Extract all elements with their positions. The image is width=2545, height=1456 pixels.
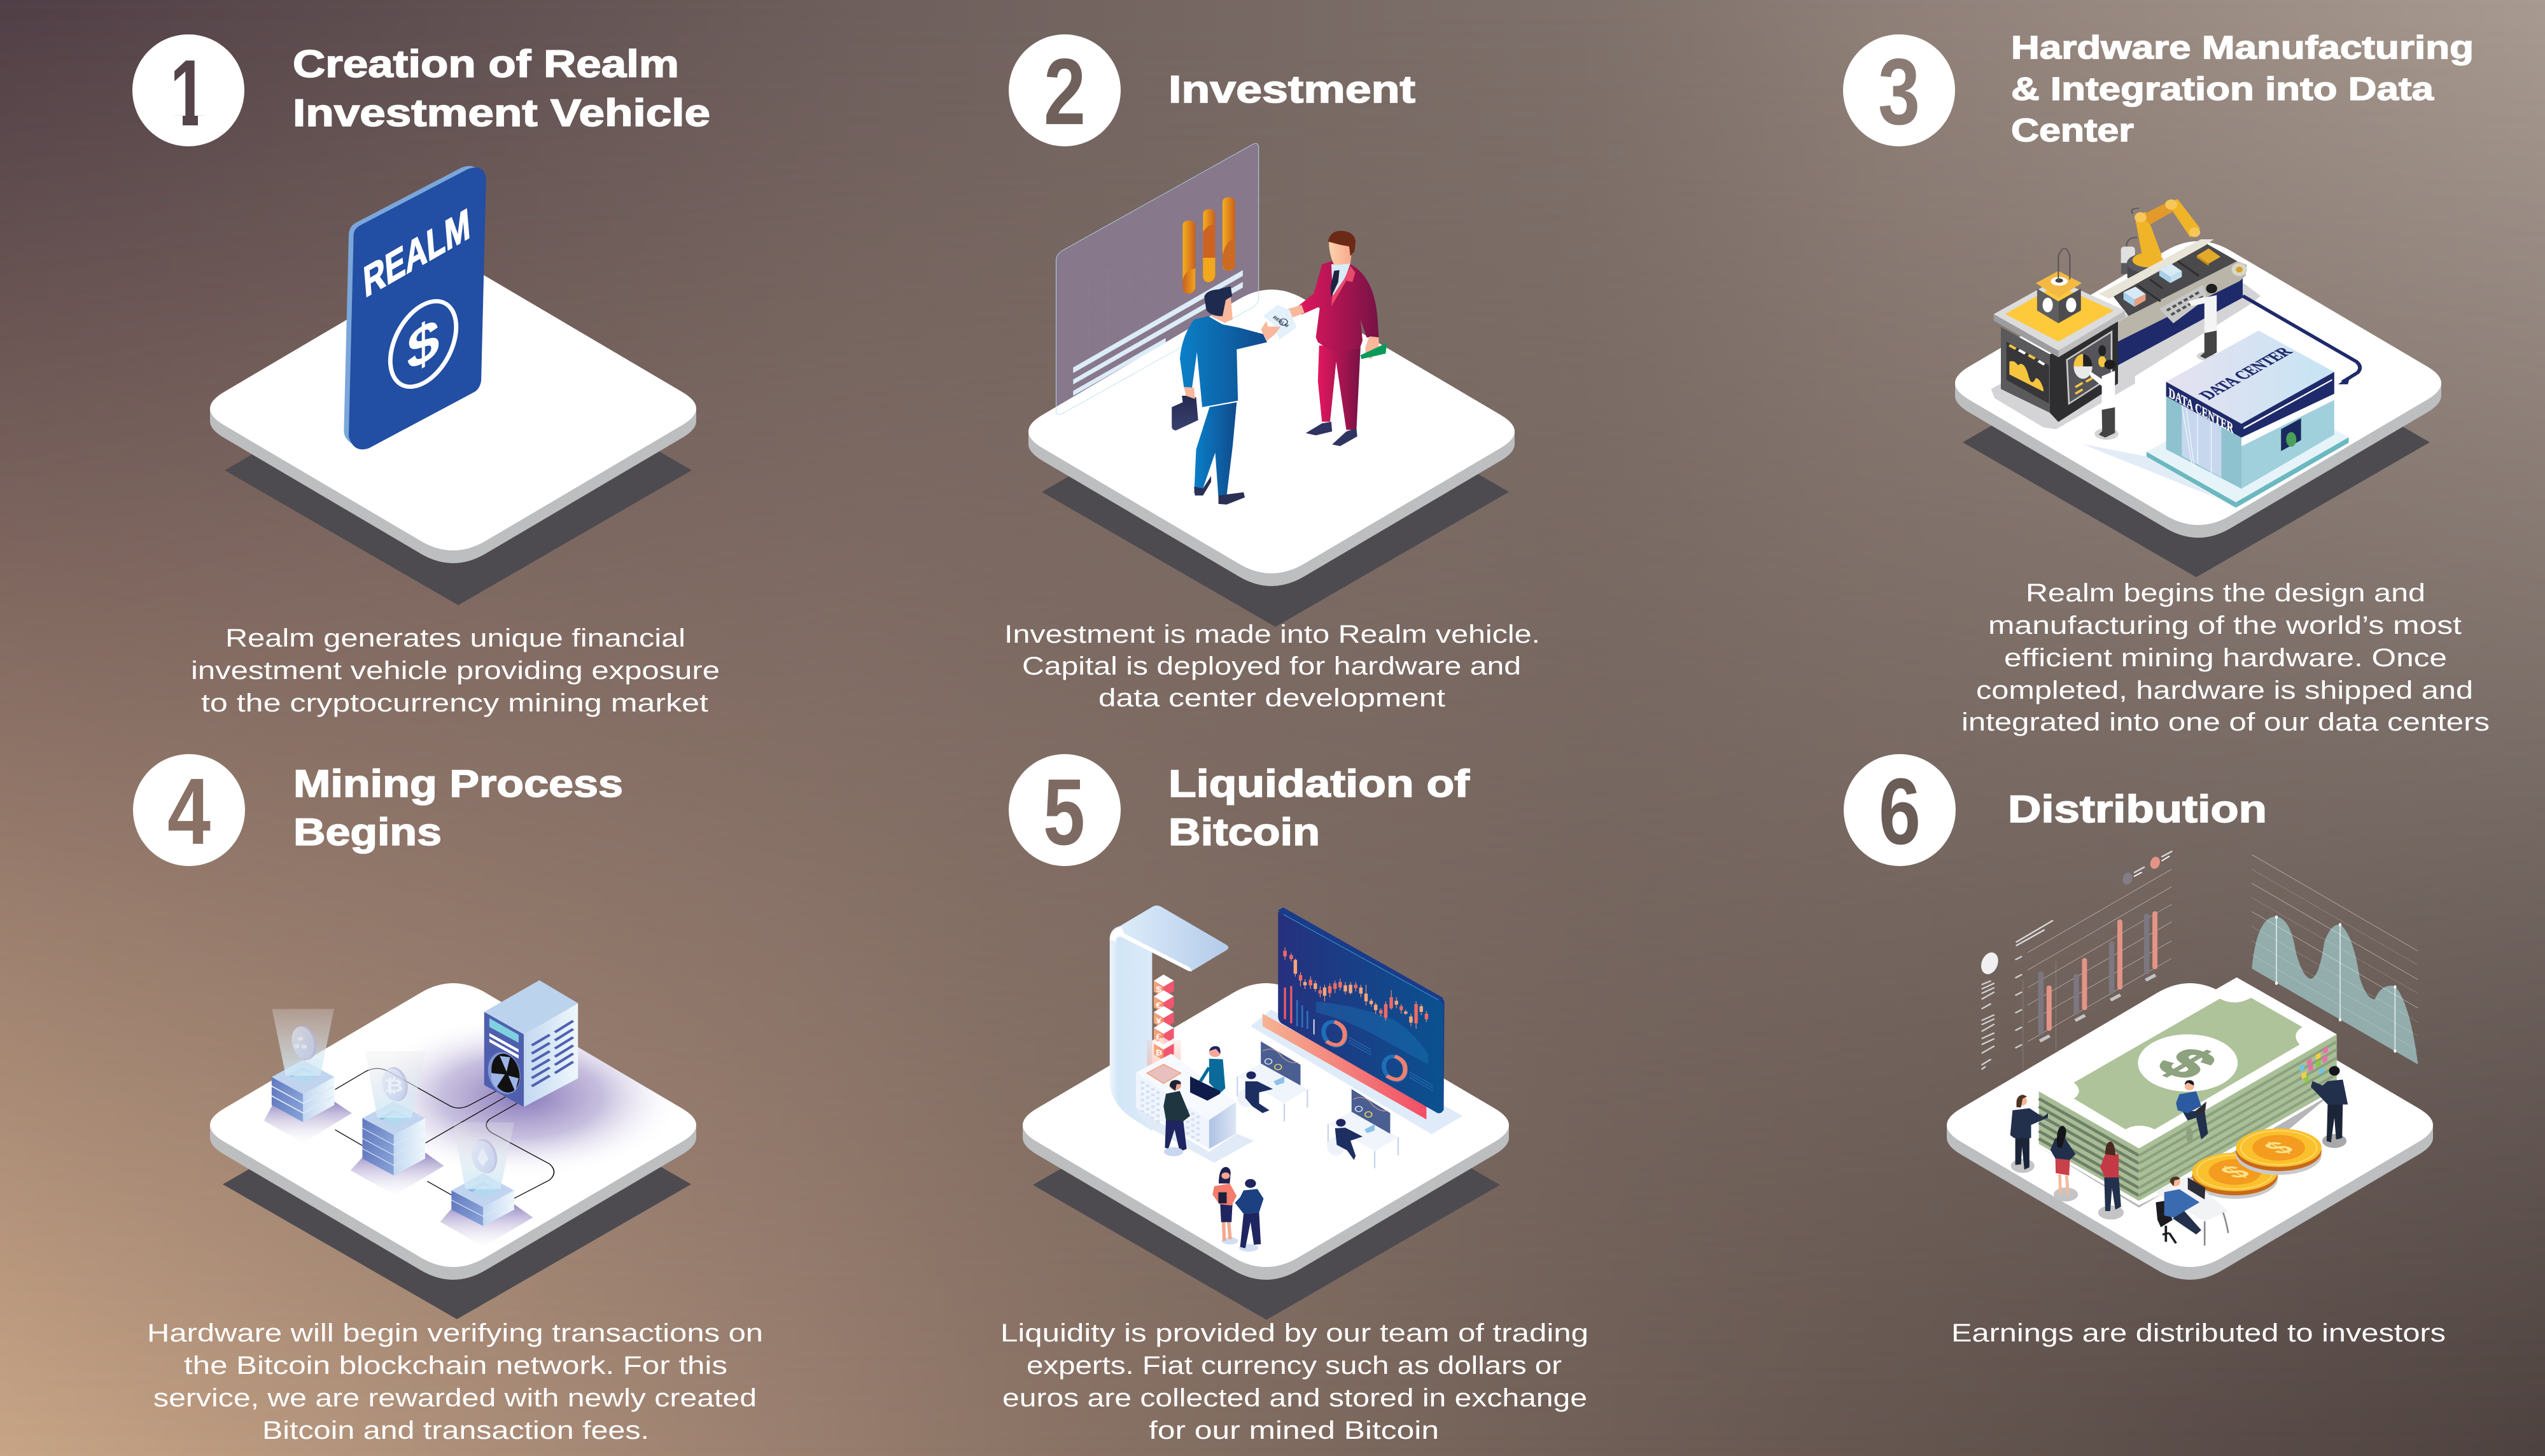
number badge 1: 1 [170,41,207,146]
heading 5: Liquidation of [1168,762,1470,805]
icon: Realm card [344,166,486,449]
number badge 6: 6 [1879,759,1921,864]
heading 4: Begins [293,811,442,853]
money stack: $ [2142,1039,2233,1088]
description 5: euros are collected and stored in exchange [1002,1384,1587,1412]
connecting wires [335,1068,554,1198]
panel: step 4 mining process [133,754,763,1445]
heading 3: Center [2011,112,2134,148]
data center building [2082,330,2349,508]
icon: Realm card: $ [407,305,440,384]
description 4: Bitcoin and transaction fees. [262,1417,649,1445]
robot arm [2121,199,2200,283]
donut charts [1321,1020,1408,1082]
red suit man [1286,231,1387,446]
description 3: completed, hardware is shipped and [1976,676,2473,704]
currency gantry: £ [1156,1033,1162,1042]
description 3: Realm begins the design and [2026,579,2425,607]
heading 6: Distribution [2008,788,2267,830]
heading 2: Investment [1168,68,1415,111]
mining rig 3 with ethereum [438,1123,536,1249]
number badge 3: 3 [1878,39,1920,144]
currency gantry: ₿ [1155,1048,1162,1057]
number badge 4 [133,754,245,866]
description 6: Earnings are distributed to investors [1951,1319,2446,1347]
description 2 [1004,620,1540,712]
illustration: mining network [407,1033,656,1164]
description 1: Realm generates unique financial [225,624,685,652]
currency gantry [1110,906,1228,1131]
illustration: trading floor [1110,906,1462,1252]
document being exchanged [1263,305,1296,340]
delivery arrow [2243,296,2360,384]
gold coins: $ [2256,1138,2303,1158]
reception counter with staff [1135,1046,1254,1163]
number badge 2 [1009,34,1121,146]
currency gantry: € [1156,1001,1161,1010]
description 3: efficient mining hardware. Once [2004,644,2447,672]
number badge 2: 2 [1044,39,1086,144]
number badge 5 [1009,754,1121,866]
panel: step 2 investment [1004,34,1540,712]
panel: step 1 creation of investment vehicle [132,34,720,717]
description 1 [191,624,720,717]
conveyor belt [2099,239,2247,365]
number badge 1 [132,34,244,146]
data center building: DATA CENTER [2169,384,2234,437]
blue suit man [1172,286,1280,505]
number badge 6 [1844,754,1956,866]
description 3: integrated into one of our data centers [1961,708,2490,736]
illustration: two businessmen exchanging document [1056,143,1387,505]
heading 3 [2011,29,2474,148]
heading 5: Bitcoin [1168,811,1320,853]
platform 4 [210,983,696,1319]
mining rig 1 with coin [262,1009,354,1145]
description 5: experts. Fiat currency such as dollars or [1027,1352,1562,1380]
trader workstation 1 [1237,1041,1307,1121]
data center building: DATA CENTER [2195,344,2297,402]
people around the money [2010,1066,2348,1245]
description 1: investment vehicle providing exposure [191,657,720,685]
gold coins [2192,1128,2322,1199]
platform 6 [1947,983,2433,1280]
illustration: factory and data center [1991,199,2360,508]
description 5: for our mined Bitcoin [1149,1417,1439,1445]
platform 3 [1955,241,2441,577]
description 4: the Bitcoin blockchain network. For this [184,1352,727,1380]
heading 5 [1168,762,1470,853]
platform 5 [1023,983,1509,1320]
description 2: Capital is deployed for hardware and [1022,652,1521,680]
machine tower [1994,248,2125,422]
number badge 4: 4 [167,759,211,864]
trading screen base and screen [1251,907,1462,1135]
description 1: to the cryptocurrency mining market [201,689,708,717]
couple talking [1212,1167,1263,1252]
engineers [2089,284,2217,440]
platform 1 [210,267,696,605]
currency gantry: $ [1156,986,1161,995]
platform 2 [1028,290,1515,627]
money stack [2037,977,2337,1208]
mining rig 2 with bitcoin: ₿ [384,1075,403,1095]
icon: Realm card: REALM [361,199,472,307]
panel: step 5 liquidation of bitcoin [1000,754,1588,1445]
description 5 [1000,1319,1588,1445]
heading 4: Mining Process [293,762,623,805]
bar chart hologram [1979,851,2172,1071]
heading 1: Investment Vehicle [293,92,710,134]
description 4: service, we are rewarded with newly created [153,1384,757,1412]
server tower [484,980,578,1107]
trader workstation 2 [1327,1089,1398,1168]
number badge 3 [1843,34,1955,146]
description 4: Hardware will begin verifying transactions on [147,1319,763,1347]
heading 1: Creation of Realm [293,43,679,85]
heading 1 [293,43,710,134]
candlestick chart [1283,948,1428,1029]
description 5: Liquidity is provided by our team of trading [1000,1319,1588,1347]
description 3: manufacturing of the world’s most [1988,612,2462,640]
document being exchanged: REALM [1272,315,1290,328]
heading 3: Hardware Manufacturing [2011,29,2474,66]
panel: step 3 hardware manufacturing [1843,29,2490,736]
description 2: data center development [1098,684,1445,712]
area chart hologram [2252,855,2418,1065]
heading 4 [293,762,623,853]
panel: step 6 distribution [1844,754,2446,1347]
description 3 [1961,579,2490,736]
description 4 [147,1319,763,1445]
sticky notes [2300,1047,2328,1084]
gold coins: $ [2212,1162,2259,1182]
currency gantry: ¥ [1156,1017,1162,1026]
heading 3: & Integration into Data [2011,71,2434,107]
holographic panel background [1056,143,1259,415]
number badge 5: 5 [1043,760,1085,865]
description 2: Investment is made into Realm vehicle. [1004,620,1540,648]
illustration: distribution of money [1979,851,2418,1245]
mining rig 2 with bitcoin [348,1051,447,1197]
